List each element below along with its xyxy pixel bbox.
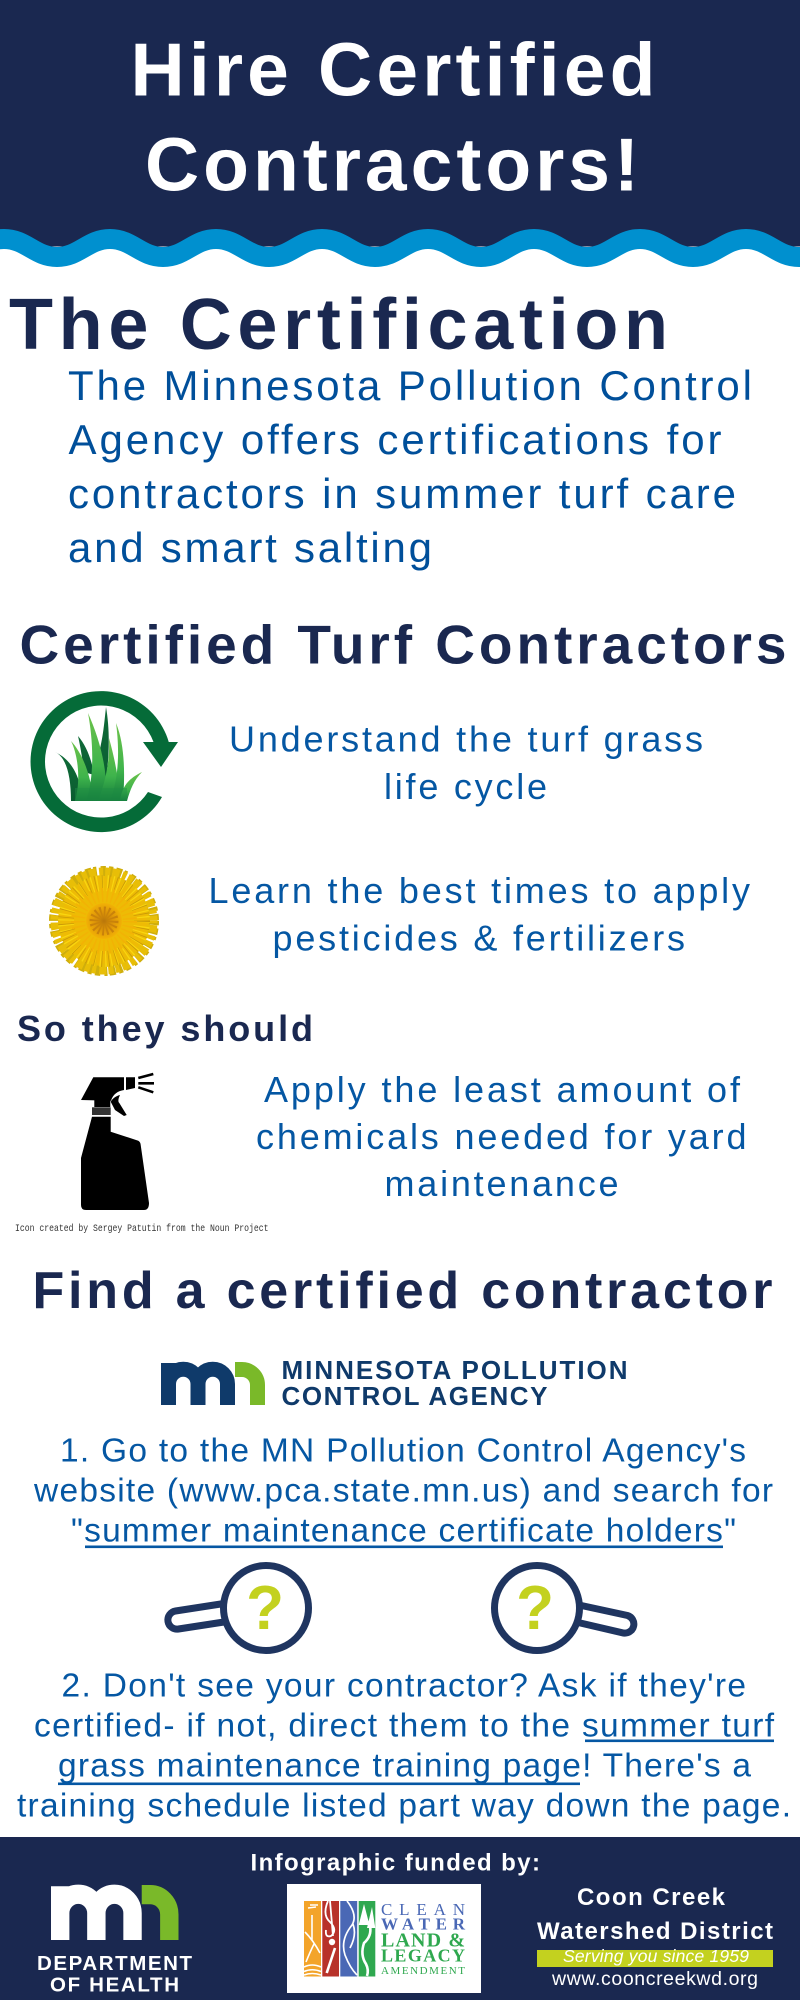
text: step 1: website (www.pca.state.mn.us) and search for [33, 1472, 773, 1510]
text: step 2 [17, 1668, 791, 1824]
text block: certification intro: and smart salting [68, 524, 432, 571]
logo: Coon Creek Watershed District: Coon Creek [577, 1884, 726, 1911]
text block: certification intro: Agency offers certifications for [68, 416, 722, 463]
logo: Coon Creek Watershed District [537, 1884, 773, 1990]
text: least amount of chemicals: maintenance [384, 1163, 618, 1204]
text: step 2: 2. Don't see your contractor? Ask if they're [62, 1668, 746, 1704]
text: best times to apply: pesticides & fertilizers [272, 918, 685, 958]
title: Hire Certified [130, 28, 656, 112]
logo: Clean Water Land & Legacy Amendment [287, 1884, 481, 1993]
icon: magnifier left [168, 1566, 308, 1650]
text: step 1: 1. Go to the MN Pollution Control Agency's [60, 1432, 746, 1470]
logo: Minnesota Pollution Control Agency: CONTROL AGENCY [282, 1381, 548, 1411]
text: understand life cycle: Understand the turf grass [229, 718, 703, 760]
text block: certification intro [68, 362, 752, 571]
text: step 2: training schedule listed part way down the page. [17, 1788, 791, 1824]
heading: Certified Turf Contractors: Certified Turf Contractors [20, 614, 786, 676]
icon: grass life cycle [31, 691, 178, 832]
logo: Clean Water Land & Legacy Amendment: WATER [381, 1914, 466, 1934]
icon: magnifier right: ? [516, 1574, 554, 1643]
text: least amount of chemicals [256, 1069, 746, 1204]
heading: The Certification: The Certification [9, 285, 668, 365]
logo: MN Department of Health: DEPARTMENT [37, 1952, 192, 1975]
text block: certification intro: contractors in summer turf care [68, 470, 736, 517]
logo: MN Department of Health: OF HEALTH [50, 1974, 179, 1997]
logo: Coon Creek Watershed District: Serving you since 1959 [563, 1946, 749, 1966]
icon: magnifier left: ? [246, 1574, 284, 1643]
text: understand life cycle [229, 718, 703, 807]
wave divider [0, 239, 800, 257]
logo: Coon Creek Watershed District: www.cooncreekwd.org [551, 1968, 758, 1990]
logo: Clean Water Land & Legacy Amendment: CLEAN [381, 1900, 465, 1919]
title: Contractors! [145, 122, 639, 206]
icon credit: Icon created by Sergey Patutin from the Noun Project [15, 1223, 268, 1235]
logo: Coon Creek Watershed District: Watershed District [537, 1918, 773, 1945]
footer heading: Infographic funded by: [250, 1850, 540, 1876]
heading: Find a certified contractor: Find a certified contractor [32, 1262, 772, 1320]
header banner [0, 0, 800, 257]
text: step 2: grass maintenance training page! There's a [58, 1748, 751, 1784]
text: best times to apply [208, 870, 750, 958]
footer panel [0, 1837, 800, 2000]
logo: Clean Water Land & Legacy Amendment: AMENDMENT [381, 1965, 465, 1977]
icon: dandelion flower [54, 871, 154, 971]
heading: So they should: So they should [17, 1008, 313, 1049]
text: least amount of chemicals: Apply the least amount of [264, 1069, 741, 1110]
title [130, 28, 656, 206]
logo: Minnesota Pollution Control Agency: MINNESOTA POLLUTION [282, 1355, 628, 1385]
text: understand life cycle: life cycle [384, 766, 547, 807]
logo: Minnesota Pollution Control Agency [168, 1355, 628, 1411]
text: step 2: certified- if not, direct them to the summer turf [34, 1708, 775, 1744]
logo: MN Department of Health [37, 1886, 192, 1997]
logo: Clean Water Land & Legacy Amendment: LAND & [381, 1930, 465, 1952]
icon: spray bottle [81, 1074, 154, 1210]
text: best times to apply: Learn the best times to apply [208, 870, 750, 911]
text: step 1: "summer maintenance certificate holders" [71, 1512, 736, 1550]
text: least amount of chemicals: chemicals needed for yard [256, 1116, 746, 1157]
text block: certification intro: The Minnesota Pollution Control [68, 362, 752, 409]
text: step 1 [33, 1432, 773, 1550]
logo: Clean Water Land & Legacy Amendment: LEGACY [381, 1946, 465, 1966]
icon: magnifier right [494, 1566, 634, 1650]
